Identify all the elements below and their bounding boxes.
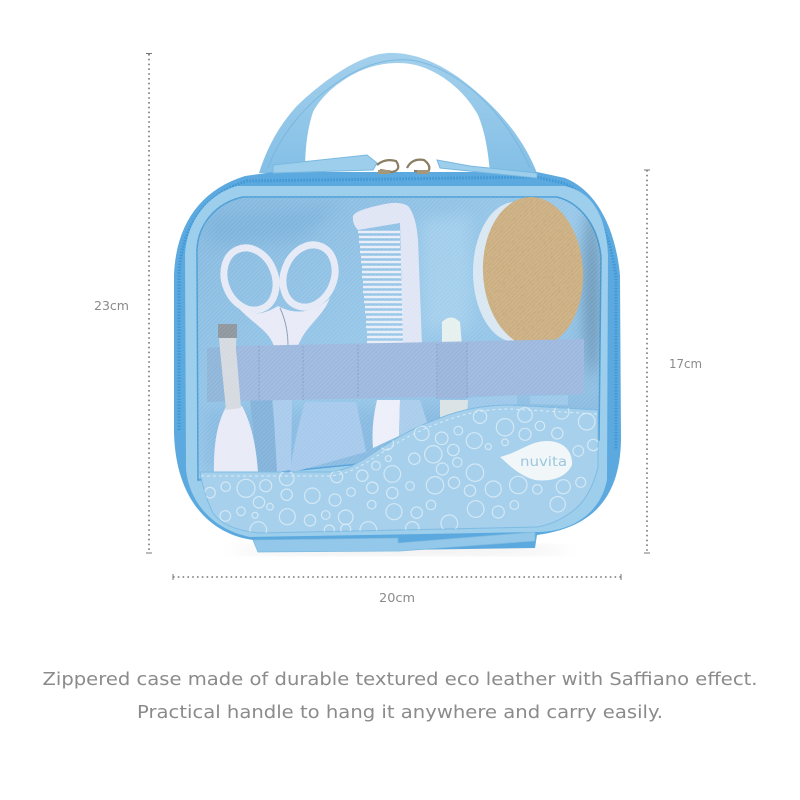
brand logo leaf: nuvita — [520, 455, 567, 470]
bottom edge tabs — [253, 532, 535, 552]
comb — [353, 203, 428, 448]
nail clippers — [214, 324, 258, 472]
case body — [174, 172, 621, 552]
mesh texture — [197, 197, 601, 480]
infographic canvas — [43, 52, 756, 722]
dimension: height 23cm: 23cm — [94, 299, 129, 313]
dimension: depth 17cm: 17cm — [669, 357, 702, 371]
nasal aspirator — [290, 402, 366, 473]
mesh window — [197, 197, 601, 480]
pieces below strap right — [467, 395, 568, 412]
description text — [42, 669, 758, 723]
description text: Zippered case made of durable textured eco leather with Saffiano effect. — [42, 669, 758, 690]
scissors — [215, 237, 344, 472]
case shadow — [230, 546, 570, 554]
zipper pulls — [377, 160, 429, 174]
front pocket — [200, 405, 598, 533]
handle stitching line — [268, 60, 530, 168]
zipper top flaps — [273, 155, 537, 178]
description text: Practical handle to hang it anywhere and carry easily. — [137, 702, 663, 723]
light piping frame — [185, 186, 608, 537]
pocket stitching — [201, 409, 597, 476]
brand logo leaf — [500, 441, 572, 480]
nail file — [440, 318, 468, 422]
zipper teeth — [179, 177, 616, 450]
hair brush — [473, 194, 587, 350]
pocket bubbles pattern — [205, 404, 599, 538]
inner fabric shading — [205, 205, 600, 470]
dimension: width 20cm: 20cm — [379, 591, 415, 605]
case handle — [259, 53, 537, 173]
product: baby care case — [174, 53, 621, 554]
elastic strap — [207, 339, 584, 402]
